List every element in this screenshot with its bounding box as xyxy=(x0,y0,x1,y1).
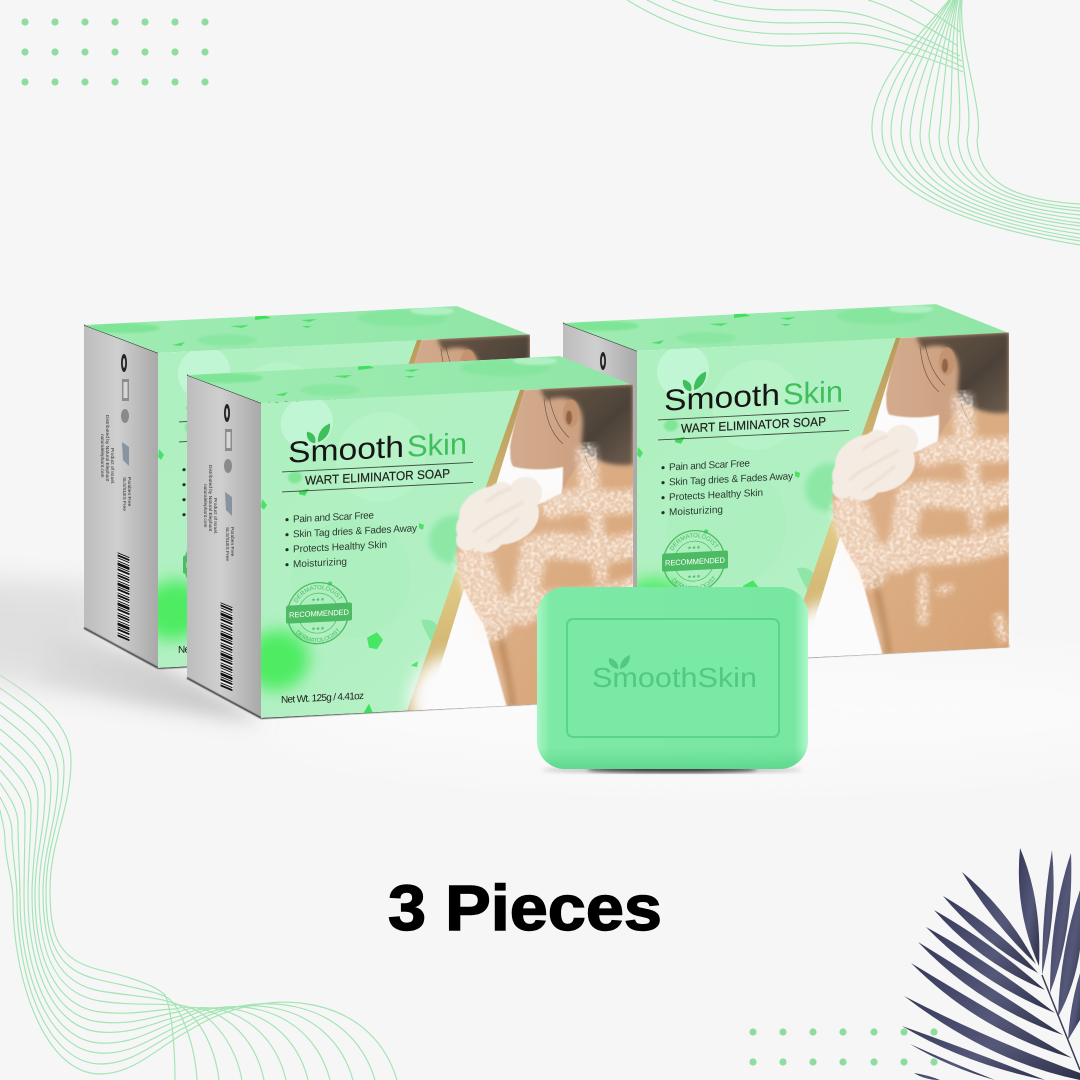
front face of box xyxy=(261,384,633,718)
box: back right: ★★★ xyxy=(687,574,701,580)
soap bar xyxy=(537,587,808,773)
soap bar: SmoothSkin xyxy=(592,662,757,693)
box: back left: ★★★ xyxy=(208,547,222,553)
palm leaf xyxy=(902,848,1080,1080)
box: back right: Protects Healthy Skin xyxy=(669,488,763,503)
box: back left: WART ELIMINATOR SOAP xyxy=(202,417,347,438)
box: back right xyxy=(526,304,1010,705)
box: back left: DERMATOLOGIST xyxy=(191,577,239,595)
front face of box: Smooth xyxy=(288,431,404,470)
floor shadow xyxy=(0,575,262,722)
wave lines: top right xyxy=(627,0,1080,245)
front face of box: Net Wt. 125g / 4.41oz xyxy=(281,691,364,706)
box: back right: Skin Tag dries & Fades Away xyxy=(669,471,793,488)
front face of box: Moisturizing xyxy=(293,557,347,570)
box: back right: Smooth xyxy=(664,379,780,418)
front face of box: Skin Tag dries & Fades Away xyxy=(293,523,417,540)
dot grid: top left xyxy=(21,18,209,86)
box: back left: ★★★ xyxy=(208,576,222,582)
front face of box: Skin xyxy=(407,428,467,464)
front face of box: DERMATOLOGIST xyxy=(294,585,342,602)
box: front: Paraben Free xyxy=(229,527,235,557)
box: back right: Net Wt. 125g / 4.41oz xyxy=(657,639,740,654)
box: back left: SLS/SLES Free xyxy=(121,477,127,511)
box: back left: Protects Healthy Skin xyxy=(190,490,284,505)
box: front: Product of Israel. xyxy=(212,498,218,534)
box: back right: WART ELIMINATOR SOAP xyxy=(681,415,826,436)
box: back right: Moisturizing xyxy=(669,505,723,518)
box: back right: RECOMMENDED xyxy=(665,556,726,568)
dot grid: bottom right xyxy=(749,1028,938,1066)
box: back left: Distributed by Natural Elephant xyxy=(104,415,110,482)
front face of box: Protects Healthy Skin xyxy=(293,540,387,555)
front face of box: DERMATOLOGIST xyxy=(296,628,340,642)
floor highlight xyxy=(260,650,1080,770)
box: back left xyxy=(83,306,568,718)
box: back left: Product of Israel. xyxy=(109,448,115,484)
box: back right: DERMATOLOGIST xyxy=(672,576,716,587)
box: back left: Skin xyxy=(304,378,364,414)
box: back left: Moisturizing xyxy=(190,507,244,520)
box: front: naturalelephant.com xyxy=(202,484,208,527)
title: 3 Pieces xyxy=(388,872,662,944)
box: back right: DERMATOLOGIST xyxy=(670,533,718,550)
box: front: SLS/SLES Free xyxy=(224,527,230,561)
box: back left: Smooth xyxy=(185,381,301,420)
box: back left: Skin Tag dries & Fades Away xyxy=(190,473,314,490)
box: back left: Pain and Scar Free xyxy=(190,460,271,475)
box: back left: naturalelephant.com xyxy=(99,434,105,477)
box: back left: RECOMMENDED xyxy=(186,558,247,570)
box: front: Distributed by Natural Elephant xyxy=(207,465,213,532)
box: back left: Paraben Free xyxy=(126,477,132,507)
front face of box: Pain and Scar Free xyxy=(293,510,374,525)
box: back right: Pain and Scar Free xyxy=(669,458,750,473)
front face of box: WART ELIMINATOR SOAP xyxy=(305,467,450,488)
front face of box: ★★★ xyxy=(311,597,325,603)
front face of box: RECOMMENDED xyxy=(289,608,350,620)
box: back left: Net Wt. 125g / 4.41oz xyxy=(178,641,261,656)
box: back right: ★★★ xyxy=(687,545,701,551)
box: back left: DERMATOLOGIST xyxy=(190,534,240,554)
box: front xyxy=(186,356,633,766)
wave lines: bottom left xyxy=(0,675,397,1080)
box: back right: Skin xyxy=(783,376,843,412)
front face of box: ★★★ xyxy=(311,626,325,632)
